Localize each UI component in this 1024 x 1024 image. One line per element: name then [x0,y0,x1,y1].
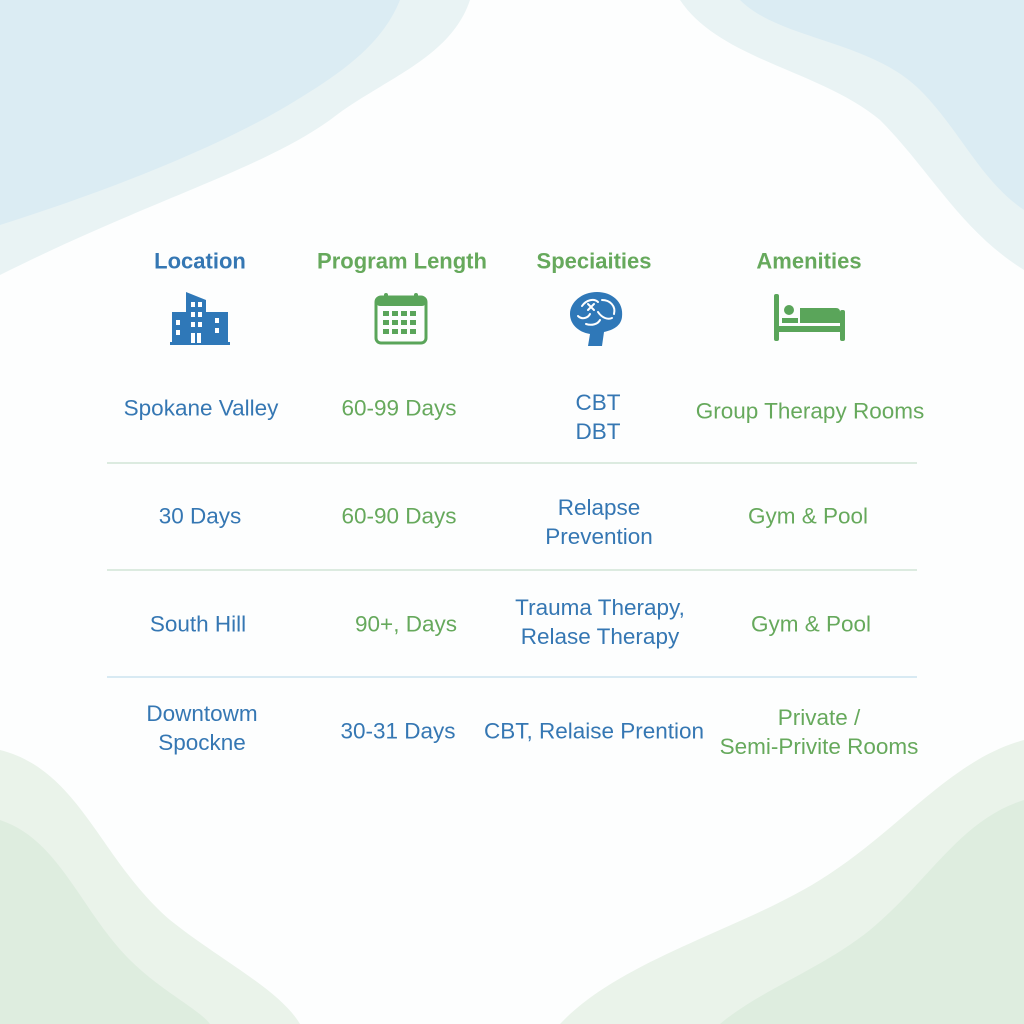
text: 90+, Days [355,612,457,636]
header: Specialties: Speciaities [537,248,651,274]
text: Gym & Pool [751,612,871,636]
text: Gym & Pool [748,504,868,528]
text: Semi-Privite Rooms [720,734,918,759]
text: Downtowm [146,701,258,726]
text: South Hill [150,612,246,636]
row 1 [124,390,924,444]
icon: bed [774,294,845,341]
text: 60-99 Days [341,396,457,420]
text: CBT, Relaise Prention [484,718,704,744]
text: Relapse [558,495,640,520]
text: 30 Days [159,504,241,528]
icon: building [170,292,230,345]
text: Relase Therapy [521,624,679,649]
text: Spokane Valley [124,396,278,420]
text: 30-31 Days [340,718,456,744]
header: Program Length: Program Length [317,248,487,274]
row 2 [159,495,868,549]
text: Spockne [158,730,246,755]
row 3 [150,595,871,649]
icon: brain [570,292,622,346]
text: CBT [576,390,620,415]
text: Group Therapy Rooms [696,398,924,424]
header: Amenities: Amenities [756,248,862,274]
text: Trauma Therapy, [515,595,685,620]
header: Location: Location [154,248,246,274]
row 4 [146,701,918,759]
text: Prevention [545,524,653,549]
text: DBT [576,419,620,444]
text: Private / [778,705,860,730]
text: 60-90 Days [341,504,457,528]
icon: calendar [374,293,428,344]
